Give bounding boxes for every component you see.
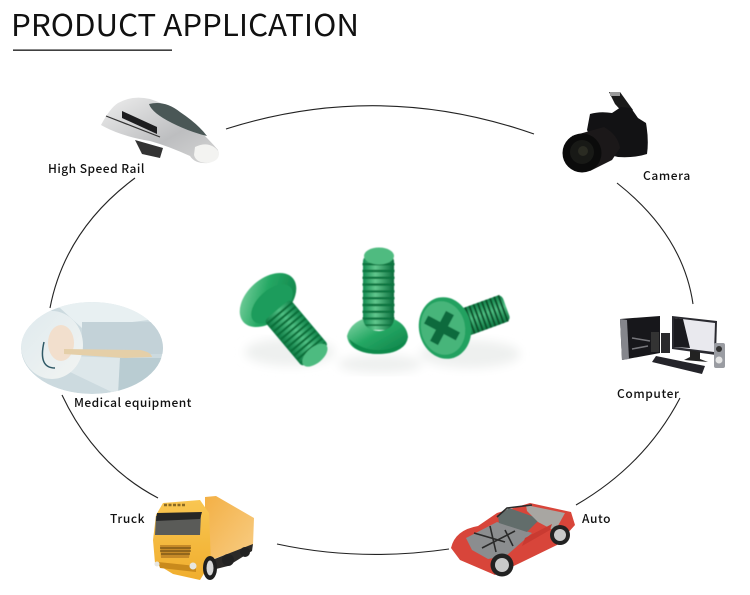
icon: truck [153, 496, 254, 580]
nose [194, 144, 219, 163]
label: camera: Camera [643, 167, 691, 184]
lens barrel [572, 127, 620, 171]
cockpit window [149, 103, 207, 136]
icon: medical equipment [21, 302, 167, 395]
scanner [21, 311, 83, 379]
grille [160, 545, 191, 558]
screw reflections [245, 338, 520, 373]
title: PRODUCT APPLICATION [11, 1, 359, 45]
car body [451, 503, 575, 575]
right screw [413, 292, 511, 364]
camera body [587, 107, 648, 157]
icon: high speed rail [101, 98, 219, 163]
title underline [13, 50, 172, 51]
icon: computer [620, 316, 725, 374]
keyboard [652, 356, 705, 374]
flash [609, 92, 633, 116]
patient bed [64, 349, 152, 358]
center screw [347, 248, 408, 354]
icon: camera [562, 92, 648, 172]
left screw [229, 262, 333, 372]
monitor [672, 316, 717, 355]
bumper [158, 562, 196, 572]
tower [620, 316, 660, 360]
front wheel [203, 556, 217, 580]
trailer [205, 496, 254, 562]
stand [684, 350, 708, 362]
icon: auto [451, 503, 575, 576]
photo: three green screws [229, 248, 520, 373]
windshield [155, 515, 201, 535]
roof lights [164, 504, 186, 506]
engine bay [466, 522, 532, 559]
side window [122, 111, 157, 134]
label: high speed rail: High Speed Rail [48, 160, 145, 177]
table base [70, 356, 120, 395]
label: auto: Auto [582, 510, 611, 527]
speaker [661, 333, 670, 353]
label: truck: Truck [110, 510, 145, 527]
label: medical equipment: Medical equipment [74, 394, 192, 411]
label: computer: Computer [617, 385, 680, 402]
phillips slot [418, 305, 466, 351]
right speaker [714, 343, 725, 368]
wheels [490, 554, 514, 576]
connector ring [50, 106, 693, 554]
cab [153, 500, 211, 580]
